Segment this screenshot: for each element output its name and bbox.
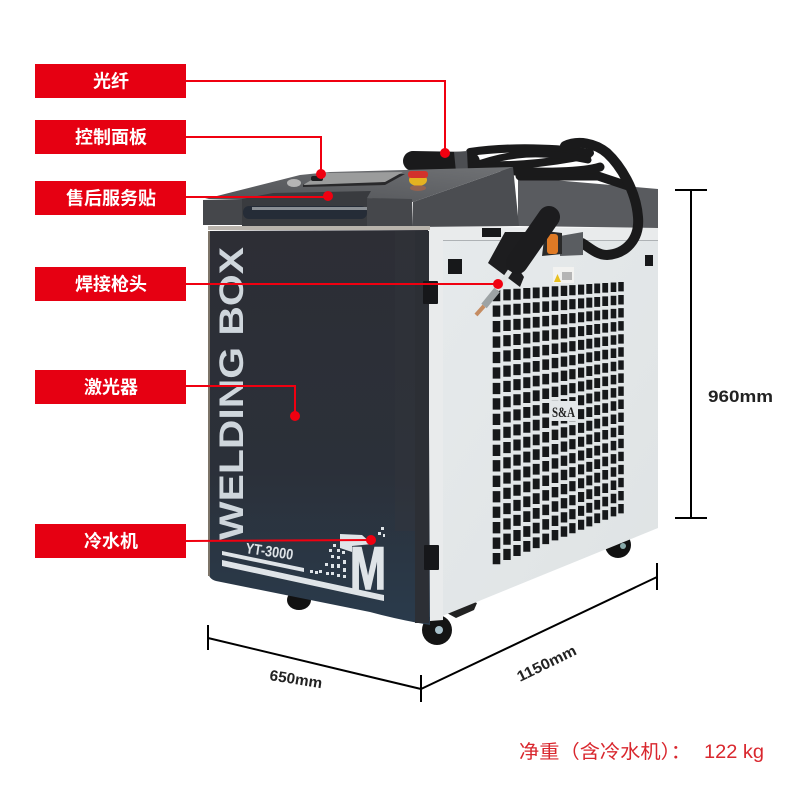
lid top surface	[205, 167, 513, 202]
label: control panel	[35, 120, 186, 154]
depth dimension: 1150mm	[514, 642, 579, 686]
handle bar	[243, 206, 367, 219]
door hinges	[423, 281, 439, 570]
label: after-sales sticker: 售后服务贴	[66, 188, 156, 208]
net weight note	[519, 741, 764, 763]
leader: control panel	[186, 137, 326, 179]
laser welding machine	[203, 143, 658, 645]
label: chiller: 冷水机	[84, 532, 138, 552]
S&A logo	[550, 401, 578, 421]
leader: welding head	[186, 279, 503, 289]
WELDING BOX lettering: WELDING BOX	[213, 247, 251, 540]
lid front blocks	[203, 191, 413, 227]
width dimension: 650mm	[268, 667, 323, 692]
label: chiller	[35, 524, 186, 558]
ventilation grid	[496, 282, 621, 564]
label: after-sales sticker	[35, 181, 186, 215]
label: control panel: 控制面板	[75, 126, 147, 148]
leader: sticker	[186, 191, 333, 201]
rear wheels	[287, 532, 631, 610]
white side panel	[428, 227, 658, 621]
fibre cables	[413, 143, 638, 255]
label: welding head	[35, 267, 186, 301]
S&A logo: S&A	[552, 405, 575, 421]
M logo	[310, 527, 386, 602]
YT-3000 model text: YT-3000	[244, 540, 294, 564]
panel stripes	[222, 551, 384, 601]
warning label	[553, 267, 574, 283]
label: welding head: 焊接枪头	[75, 274, 147, 294]
label: laser	[35, 370, 186, 404]
dark front panel	[208, 230, 430, 625]
leader: fibre	[186, 81, 450, 158]
leader: chiller	[186, 535, 376, 545]
panel buttons	[287, 176, 323, 187]
leader: laser	[186, 386, 300, 421]
width dimension	[208, 625, 421, 702]
side panel latches	[448, 228, 653, 274]
emergency stop button	[408, 171, 428, 191]
lid base shadow	[208, 226, 430, 230]
label: laser: 激光器	[84, 378, 138, 398]
lid right side	[413, 167, 519, 227]
label: fibre	[35, 64, 186, 98]
height dimension	[675, 190, 773, 518]
control panel screen	[303, 172, 405, 187]
welding torch	[476, 217, 583, 315]
net weight note: 122 kg	[704, 742, 764, 763]
cable bracket	[454, 151, 468, 172]
side panel top band	[428, 227, 658, 621]
M logo: M	[350, 535, 386, 602]
front wheel and brake	[422, 600, 477, 645]
rear lid section	[518, 177, 658, 228]
label: fibre: 光纤	[93, 72, 129, 92]
depth dimension	[421, 563, 657, 689]
stippled front panel edge	[208, 231, 429, 623]
height dimension: 960mm	[708, 387, 773, 406]
net weight note: 净重（含冷水机）：	[519, 741, 691, 763]
